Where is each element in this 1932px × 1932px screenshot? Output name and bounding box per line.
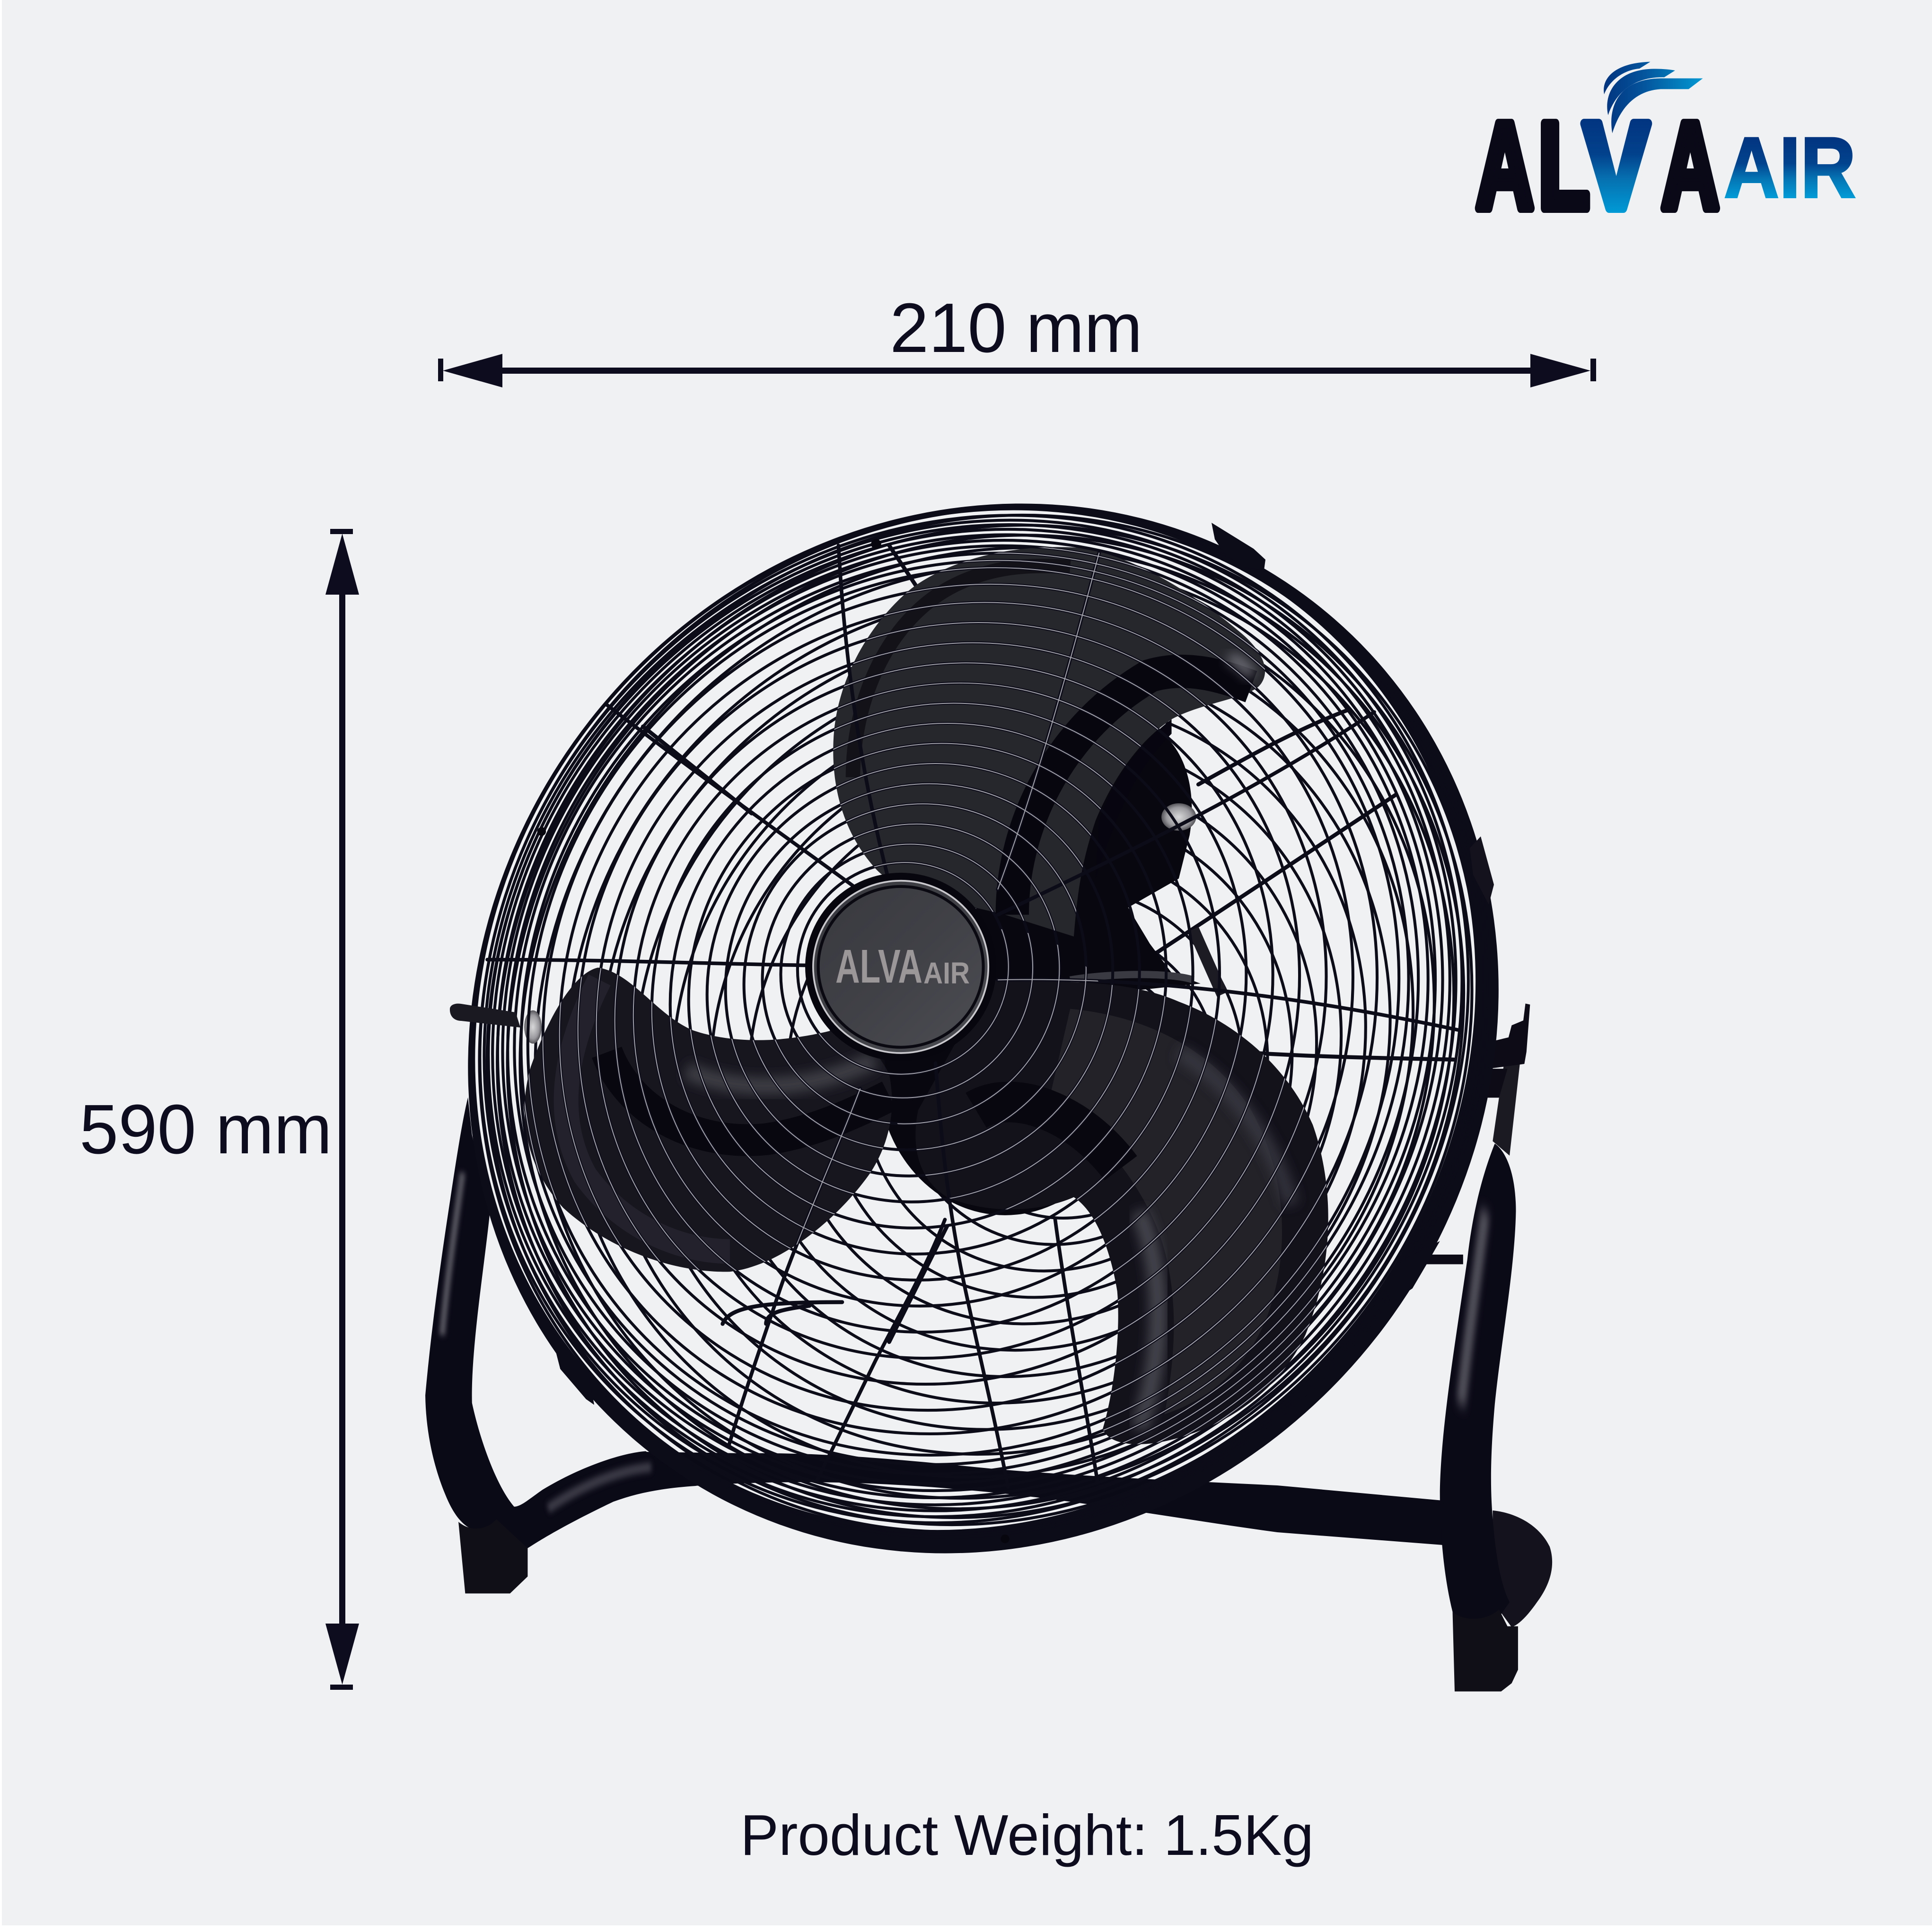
right rubber foot [1453, 1609, 1518, 1691]
logo wordmark ALVA [1476, 97, 1719, 235]
rear grille rings [273, 304, 1696, 1741]
height dimension label: 590 mm [79, 1090, 332, 1168]
logo swoosh feathers [1604, 62, 1703, 133]
left rubber foot [458, 1519, 527, 1593]
fan product illustration [425, 503, 1553, 1692]
hub logo text: ALVA [835, 940, 922, 993]
hub logo text: AIR [923, 956, 970, 990]
right side cage clip [1470, 836, 1494, 905]
fan cage and blades, traced coordinates [468, 503, 1499, 1554]
front grille rings [278, 316, 1670, 1722]
width dimension label: 210 mm [890, 289, 1142, 367]
logo: Alva Air [1476, 62, 1856, 235]
lower right cage clip [1385, 1241, 1440, 1303]
left fan blade [525, 967, 892, 1272]
centre hub badge [805, 873, 996, 1061]
logo wordmark ALVA: V [1583, 97, 1649, 234]
logo wordmark ALVA: A [1661, 97, 1719, 235]
height dimension arrow [325, 529, 359, 1690]
motor housing and bracket [878, 730, 1201, 1215]
top right cage clip [1212, 523, 1265, 570]
rim hardware rivets [537, 539, 1264, 1543]
silver bracket bolts [524, 803, 1196, 1044]
top fan blade [833, 547, 1265, 937]
lower left cage clip [553, 1343, 594, 1405]
left stand leg and base [425, 1098, 696, 1593]
product weight text: Product Weight: 1.5Kg [740, 1803, 1314, 1867]
right cross strut [1425, 1255, 1463, 1264]
cage front rim wire [268, 306, 1683, 1734]
logo wordmark AIR: AIR [1724, 119, 1856, 216]
ring highlights over blades [524, 547, 1328, 1444]
bottom right fan blade [915, 980, 1328, 1444]
rear grille spokes and handle [643, 545, 1454, 1342]
right pivot bracket [1476, 1003, 1530, 1156]
right stand leg and base [1425, 1003, 1552, 1691]
cage rear rim [468, 503, 1499, 1553]
logo wordmark ALVA: L [1538, 97, 1590, 235]
left pivot bolt and bracket [450, 1003, 520, 1027]
logo wordmark ALVA: A [1476, 97, 1534, 235]
rear base tube [646, 1452, 1443, 1545]
motor light details [1070, 975, 1193, 980]
front grille spokes [487, 545, 1461, 1487]
width dimension arrow [438, 354, 1596, 387]
